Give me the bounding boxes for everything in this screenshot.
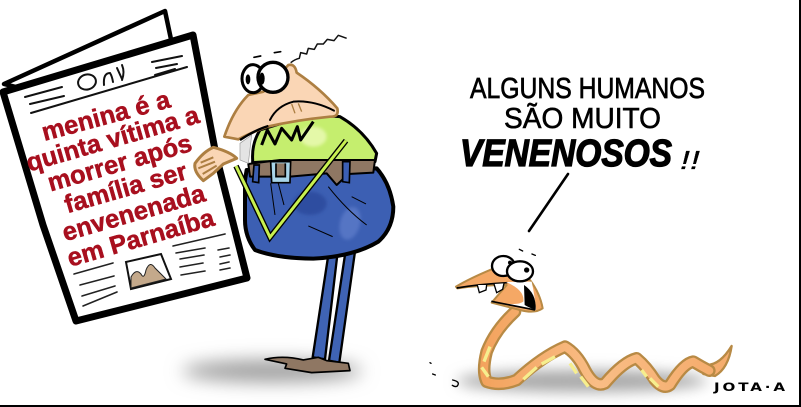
eyes [242,62,288,93]
speech text: !! [680,145,700,175]
snake eyebrows [519,249,535,255]
snake [430,249,732,387]
snake tail tip [703,346,732,376]
speech text: ALGUNS HUMANOS [470,73,705,105]
hair [291,35,347,63]
shadow under the snake [457,370,707,392]
trousers [245,168,393,259]
headline: envenenada [59,179,209,247]
mouth line [270,101,334,120]
speech text: SÃO MUITO [504,101,661,135]
headline [23,85,218,273]
newspaper picture [126,254,171,289]
snake belly scales [482,347,658,387]
belt buckle [271,162,291,183]
snake head [456,269,543,312]
newspaper [3,11,247,321]
speech text [460,73,705,175]
face outline jaw [240,126,268,140]
belt loops [253,162,350,183]
speech text: VENENOSOS [460,133,672,175]
motion marks [430,363,458,387]
shoes [265,357,350,373]
headline: morrer após [44,129,195,197]
snake fangs [477,283,504,293]
suspender V [236,141,346,237]
headline: quinta vítima a [23,101,203,177]
signature: JOTA·A [713,380,788,394]
headline: menina é a [39,85,174,147]
speech line [529,174,568,231]
newspaper footer columns [74,234,230,306]
eyebrows [254,52,281,57]
hand [195,147,237,181]
legs [313,252,355,363]
shirt [253,115,377,163]
head [224,65,338,139]
snake body [484,312,709,387]
snake open mouth [491,282,536,310]
newspaper masthead [25,56,187,113]
snake eyes [492,256,533,281]
shadow under the man [182,360,362,382]
belt [248,160,375,185]
collar zigzag [262,122,313,145]
trouser creases [271,183,367,237]
headline: família ser [61,157,190,219]
grey arm sleeve [240,135,252,163]
newspaper front page [3,35,247,321]
newspaper back page [4,11,172,88]
man reading [195,35,393,373]
headline: em Parnaíba [64,204,218,273]
